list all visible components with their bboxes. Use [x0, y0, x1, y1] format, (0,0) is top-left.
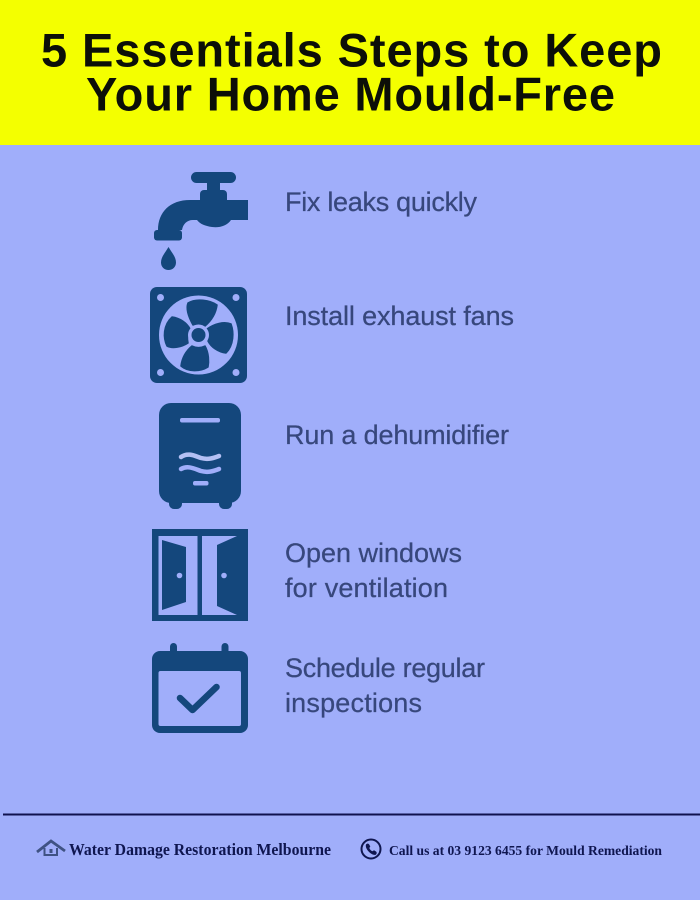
text: company name: Water Damage Restoration Melbourne: [69, 840, 331, 859]
text: ventilation: [285, 538, 462, 603]
step 3: dehumidifier: [159, 403, 509, 509]
icon: exhaust fan: [150, 287, 247, 383]
title: Your Home Mould-Free: [86, 68, 615, 120]
text: dehumidifier: Run a dehumidifier: [285, 420, 509, 450]
step 2: exhaust fans: [150, 287, 514, 383]
icon: phone: [362, 840, 380, 858]
icon: calendar with check: [152, 643, 248, 733]
title: 5 Essentials Steps to Keep: [41, 24, 662, 76]
header banner: [0, 0, 700, 145]
text: ventilation: for ventilation: [285, 573, 448, 603]
step 5: inspections: [152, 643, 485, 733]
icon: open window: [152, 529, 248, 621]
text: inspections: Schedule regular: [285, 653, 485, 683]
text: contact: Call us at 03 9123 6455 for Mould Remediation: [389, 843, 662, 858]
title: [41, 24, 662, 120]
footer: contact: [362, 840, 662, 858]
text: fix leaks: Fix leaks quickly: [285, 187, 478, 217]
icon: dehumidifier: [159, 403, 241, 509]
icon: house: [37, 841, 65, 855]
text: inspections: [285, 653, 485, 718]
footer: company name: [37, 840, 331, 859]
text: inspections: inspections: [285, 688, 422, 718]
text: ventilation: Open windows: [285, 538, 462, 568]
step 1: fix leaks: [154, 172, 478, 270]
icon: dripping tap: [154, 172, 248, 270]
step 4: ventilation: [152, 529, 462, 621]
text: exhaust fans: Install exhaust fans: [285, 301, 514, 331]
